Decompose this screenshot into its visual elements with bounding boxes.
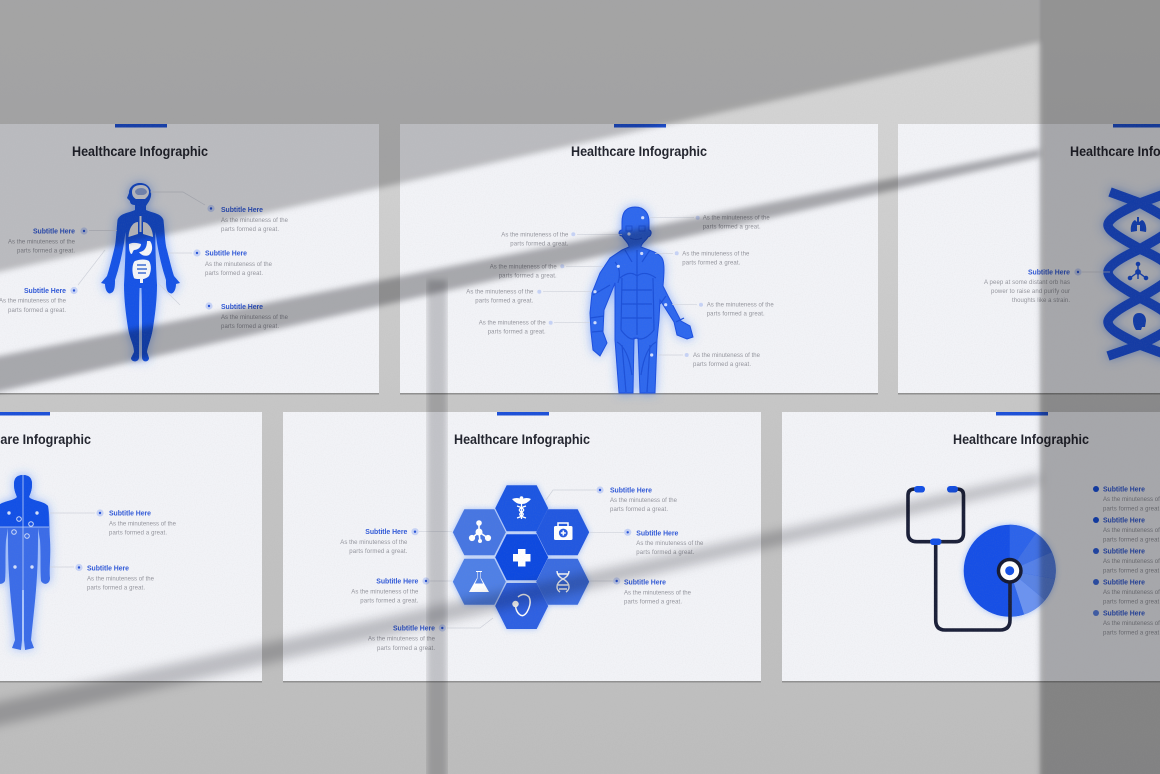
callout: first aid: Subtitle Here bbox=[636, 530, 678, 538]
callout: first aid: parts formed a great. bbox=[636, 550, 695, 556]
icon: network bbox=[1128, 262, 1148, 280]
callout: intestine: Subtitle Here bbox=[221, 304, 263, 311]
panel: DNA bbox=[898, 124, 1160, 394]
callout: flask: As the minuteness of the bbox=[351, 590, 419, 596]
callout: caduceus: parts formed a great. bbox=[610, 507, 668, 513]
callout: DNA bbox=[984, 268, 1110, 304]
icon: lungs bbox=[1131, 217, 1146, 232]
callout: thigh right bbox=[657, 353, 761, 368]
panel: stethoscope bbox=[782, 412, 1160, 682]
callout list: parts formed a great. bbox=[1103, 630, 1160, 636]
callout: network: parts formed a great. bbox=[349, 549, 408, 555]
hexagon cluster bbox=[453, 485, 589, 629]
callout: intestine bbox=[158, 283, 289, 330]
icon: stethoscope bbox=[513, 594, 530, 616]
callout: forearm left: As the minuteness of the bbox=[479, 321, 546, 327]
icon: head bbox=[1133, 313, 1146, 330]
callout: intestine: parts formed a great. bbox=[221, 324, 279, 330]
callout: lower body: As the minuteness of the bbox=[87, 576, 155, 582]
callout: DNA: Subtitle Here bbox=[1028, 270, 1070, 276]
icon: flask bbox=[469, 571, 489, 592]
callout: dna bbox=[590, 577, 692, 606]
callout: network: Subtitle Here bbox=[365, 529, 407, 536]
callout: lower body: Subtitle Here bbox=[87, 566, 129, 572]
callout: brain: parts formed a great. bbox=[221, 227, 279, 233]
callout: first aid: As the minuteness of the bbox=[636, 541, 704, 547]
panel: internal organs body bbox=[0, 124, 379, 394]
callout: flask bbox=[351, 577, 452, 604]
callout: lower body bbox=[50, 564, 155, 592]
panel: muscular body bbox=[400, 124, 878, 394]
callout: head right: parts formed a great. bbox=[703, 225, 761, 231]
callout: DNA: A peep at some distant orb has bbox=[984, 280, 1070, 286]
callout: liver: Subtitle Here bbox=[24, 288, 66, 295]
callout: forearm right: parts formed a great. bbox=[707, 312, 765, 318]
callout: chin left: As the minuteness of the bbox=[501, 232, 569, 238]
callout: network: As the minuteness of the bbox=[340, 540, 408, 546]
callout list bbox=[1093, 486, 1160, 636]
callout: shoulder left: As the minuteness of the bbox=[490, 264, 557, 270]
callout: upper arm left bbox=[466, 290, 592, 305]
stethoscope bbox=[908, 486, 1023, 630]
heading: Healthcare Infographic bbox=[571, 144, 708, 159]
callout: stethoscope: Subtitle Here bbox=[393, 626, 435, 632]
callout: stomach: Subtitle Here bbox=[205, 250, 247, 258]
callout: head right: As the minuteness of the bbox=[703, 216, 770, 222]
callout: neck right: parts formed a great. bbox=[682, 260, 741, 266]
callout list: parts formed a great. bbox=[1103, 599, 1160, 605]
callout: forearm right bbox=[672, 303, 774, 318]
callout: chin left bbox=[501, 232, 622, 247]
callout: caduceus: Subtitle Here bbox=[610, 488, 652, 494]
callout: thigh right: parts formed a great. bbox=[693, 362, 751, 368]
callout: liver bbox=[0, 250, 105, 314]
callout: DNA: power to raise and purify our bbox=[991, 289, 1070, 295]
heading: Healthcare Infographic bbox=[953, 432, 1090, 447]
callout: flask: parts formed a great. bbox=[360, 598, 419, 604]
callout: intestine: As the minuteness of the bbox=[221, 315, 289, 321]
callout: DNA: thoughts like a strain. bbox=[1012, 298, 1070, 304]
callout list: parts formed a great. bbox=[1103, 568, 1160, 574]
callout: dna: parts formed a great. bbox=[624, 600, 682, 606]
callout: dna: As the minuteness of the bbox=[624, 590, 692, 596]
callout: lower body: parts formed a great. bbox=[87, 586, 145, 592]
heading: Healthcare Infographic bbox=[72, 144, 209, 159]
icon: intestines bbox=[132, 260, 151, 283]
callout: stomach: parts formed a great. bbox=[205, 271, 263, 277]
icon: brain bbox=[132, 185, 149, 199]
icon: caduceus bbox=[512, 496, 531, 519]
callout: brain: As the minuteness of the bbox=[221, 218, 289, 224]
callout: thigh right: As the minuteness of the bbox=[693, 353, 761, 359]
callout: caduceus: As the minuteness of the bbox=[610, 498, 678, 504]
callout list: parts formed a great. bbox=[1103, 537, 1160, 543]
icon: first aid kit bbox=[554, 523, 572, 540]
callout: stethoscope: As the minuteness of the bbox=[368, 636, 436, 642]
icon: network bbox=[469, 521, 491, 542]
callout list: parts formed a great. bbox=[1103, 506, 1160, 512]
callout: liver: As the minuteness of the bbox=[0, 298, 67, 304]
callout: stomach bbox=[168, 249, 273, 277]
callout: stethoscope: parts formed a great. bbox=[377, 646, 435, 652]
callout: upper body bbox=[50, 509, 177, 536]
callout: stomach: As the minuteness of the bbox=[205, 262, 273, 268]
body figure bbox=[0, 475, 50, 650]
callout: dna: Subtitle Here bbox=[624, 580, 666, 586]
callout: upper arm left: As the minuteness of the bbox=[466, 290, 534, 296]
callout: upper body: parts formed a great. bbox=[109, 530, 167, 536]
callout: neck right bbox=[655, 251, 750, 266]
callout: shoulder left bbox=[490, 264, 604, 279]
callout: lungs: Subtitle Here bbox=[33, 228, 75, 236]
panel: hexagons bbox=[283, 412, 761, 682]
callout: shoulder left: parts formed a great. bbox=[499, 273, 557, 279]
callout: brain bbox=[150, 192, 289, 233]
icon: liver and stomach bbox=[129, 241, 152, 256]
callout: upper body: Subtitle Here bbox=[109, 510, 151, 518]
callout: stethoscope bbox=[368, 618, 493, 652]
muscle figure bbox=[590, 207, 693, 393]
callout list: Subtitle Here bbox=[1103, 548, 1145, 556]
callout: upper body: As the minuteness of the bbox=[109, 522, 177, 528]
body figure with organs bbox=[101, 183, 180, 361]
heading: Healthcare Infographic bbox=[454, 432, 591, 447]
callout: forearm left: parts formed a great. bbox=[488, 330, 546, 336]
callout: lungs: As the minuteness of the bbox=[8, 240, 76, 246]
callout: brain: Subtitle Here bbox=[221, 207, 263, 214]
pie disc bbox=[964, 525, 1056, 617]
panel: front body bbox=[0, 412, 262, 682]
callout: lungs bbox=[8, 227, 117, 254]
callout: neck right: As the minuteness of the bbox=[682, 251, 750, 257]
callout: flask: Subtitle Here bbox=[376, 578, 418, 586]
icon: lungs bbox=[128, 216, 153, 237]
icon: dna bbox=[557, 571, 569, 592]
callout list: Subtitle Here bbox=[1103, 518, 1145, 524]
callout: forearm left bbox=[479, 321, 590, 336]
callout: first aid bbox=[590, 529, 704, 556]
callout: head right bbox=[650, 216, 770, 231]
callout: network bbox=[340, 528, 452, 555]
callout: caduceus bbox=[546, 486, 678, 513]
callout: liver: parts formed a great. bbox=[8, 308, 66, 314]
callout list: Subtitle Here bbox=[1103, 486, 1145, 494]
callout list: Subtitle Here bbox=[1103, 610, 1145, 618]
callout: forearm right: As the minuteness of the bbox=[707, 303, 774, 309]
callout: lungs: parts formed a great. bbox=[17, 248, 75, 254]
DNA helix bbox=[1108, 192, 1160, 356]
callout list: Subtitle Here bbox=[1103, 580, 1145, 586]
callout: upper arm left: parts formed a great. bbox=[475, 299, 534, 305]
callout: chin left: parts formed a great. bbox=[510, 241, 569, 247]
icon: cross bbox=[513, 549, 530, 566]
